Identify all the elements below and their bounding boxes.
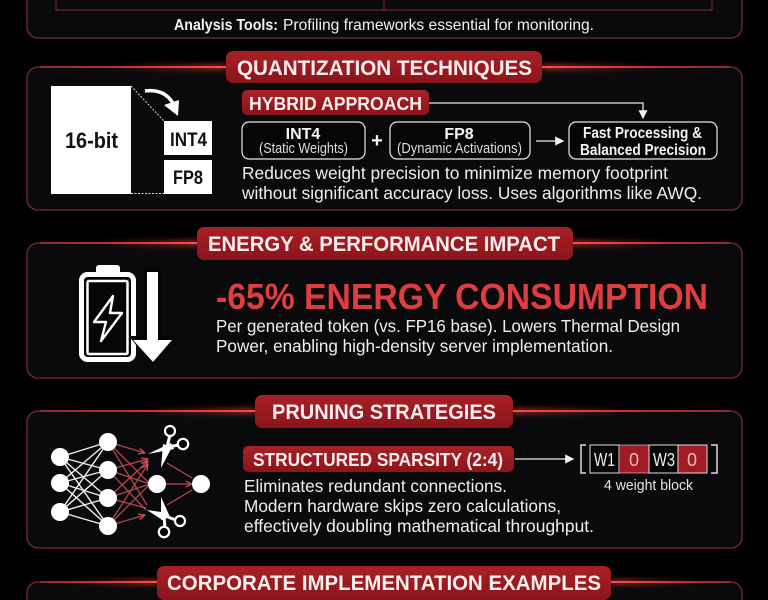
- panel: corporate implementation examples: [27, 566, 742, 600]
- heading: corporate implementation examples: CORPORATE IMPLEMENTATION EXAMPLES: [167, 572, 601, 595]
- heading: energy and performance impact: [197, 227, 573, 260]
- diagram: 16-bit split into INT4 and FP8: INT4: [170, 130, 207, 151]
- text: energy description: Per generated token (vs. FP16 base). Lowers Thermal Design: [216, 316, 680, 336]
- diagram: 4 weight block: 0: [629, 450, 639, 470]
- text: energy description: [216, 316, 680, 356]
- diagram: 4 weight block: 0: [687, 450, 697, 470]
- box: INT4 static weights: (Static Weights): [259, 141, 348, 157]
- diagram: 4 weight block: [581, 445, 717, 494]
- text: energy description: Power, enabling high-density server implementation.: [216, 336, 613, 356]
- arrow: to result: [536, 140, 563, 142]
- text: quantization description: without significant accuracy loss. Uses algorithms like AWQ.: [241, 183, 702, 203]
- diagram: 4 weight block: W1: [594, 450, 615, 470]
- diagram: 4 weight block: W3: [653, 450, 675, 470]
- icon: pruned neural network: [51, 433, 210, 535]
- box: INT4 static weights: INT4: [286, 126, 320, 143]
- box: FP8 dynamic activations: (Dynamic Activations): [397, 141, 522, 157]
- diagram: 4 weight block: 4 weight block: [604, 477, 693, 494]
- arrow: hybrid to result: [429, 103, 643, 118]
- text: pruning description: Modern hardware skips zero calculations,: [244, 496, 561, 516]
- panel: energy and performance impact: [27, 227, 742, 378]
- box: FP8 dynamic activations: FP8: [444, 126, 474, 143]
- panel: quantization techniques: [27, 51, 742, 210]
- icon: scissors lower: [147, 497, 185, 537]
- heading: energy and performance impact: ENERGY & PERFORMANCE IMPACT: [208, 233, 560, 256]
- heading: quantization techniques: QUANTIZATION TECHNIQUES: [237, 57, 532, 80]
- box: FP8 dynamic activations: [390, 122, 530, 159]
- text: quantization description: Reduces weight precision to minimize memory footprint: [242, 163, 668, 183]
- box: INT4 static weights: [242, 122, 365, 159]
- box: fast processing result: Balanced Precision: [580, 142, 706, 159]
- diagram: 16-bit split into INT4 and FP8: [51, 86, 212, 194]
- diagram: 16-bit split into INT4 and FP8: FP8: [173, 168, 203, 189]
- badge: hybrid approach: HYBRID APPROACH: [249, 94, 422, 114]
- text: pruning description: effectively doubling mathematical throughput.: [244, 516, 594, 536]
- text: quantization description: [241, 163, 702, 203]
- panel: profiling tools (top cut off): Analysis Tools:: [174, 17, 278, 34]
- text: pruning description: Eliminates redundant connections.: [244, 476, 507, 496]
- panel: profiling tools (top cut off): Profiling frameworks essential for monitoring.: [283, 17, 594, 34]
- heading: pruning strategies: PRUNING STRATEGIES: [272, 401, 496, 424]
- heading: pruning strategies: [255, 395, 513, 428]
- badge: structured sparsity: STRUCTURED SPARSITY (2:4): [253, 450, 503, 470]
- arrow: sparsity to weight block: [515, 458, 573, 460]
- panel: pruning strategies: [27, 395, 742, 548]
- icon: scissors upper: [148, 426, 188, 468]
- heading: corporate implementation examples: [157, 566, 611, 600]
- text: pruning description: [244, 476, 594, 536]
- box: fast processing result: Fast Processing &: [583, 125, 702, 142]
- diagram: 16-bit split into INT4 and FP8: 16-bit: [65, 128, 119, 153]
- stat: -65% energy consumption: -65% ENERGY CONSUMPTION: [216, 276, 708, 317]
- icon: battery with down arrow: [82, 265, 176, 367]
- box: fast processing result: [569, 122, 717, 159]
- panel: profiling tools (top cut off): [27, 0, 742, 38]
- heading: quantization techniques: [226, 51, 542, 83]
- plus sign: +: [371, 130, 383, 152]
